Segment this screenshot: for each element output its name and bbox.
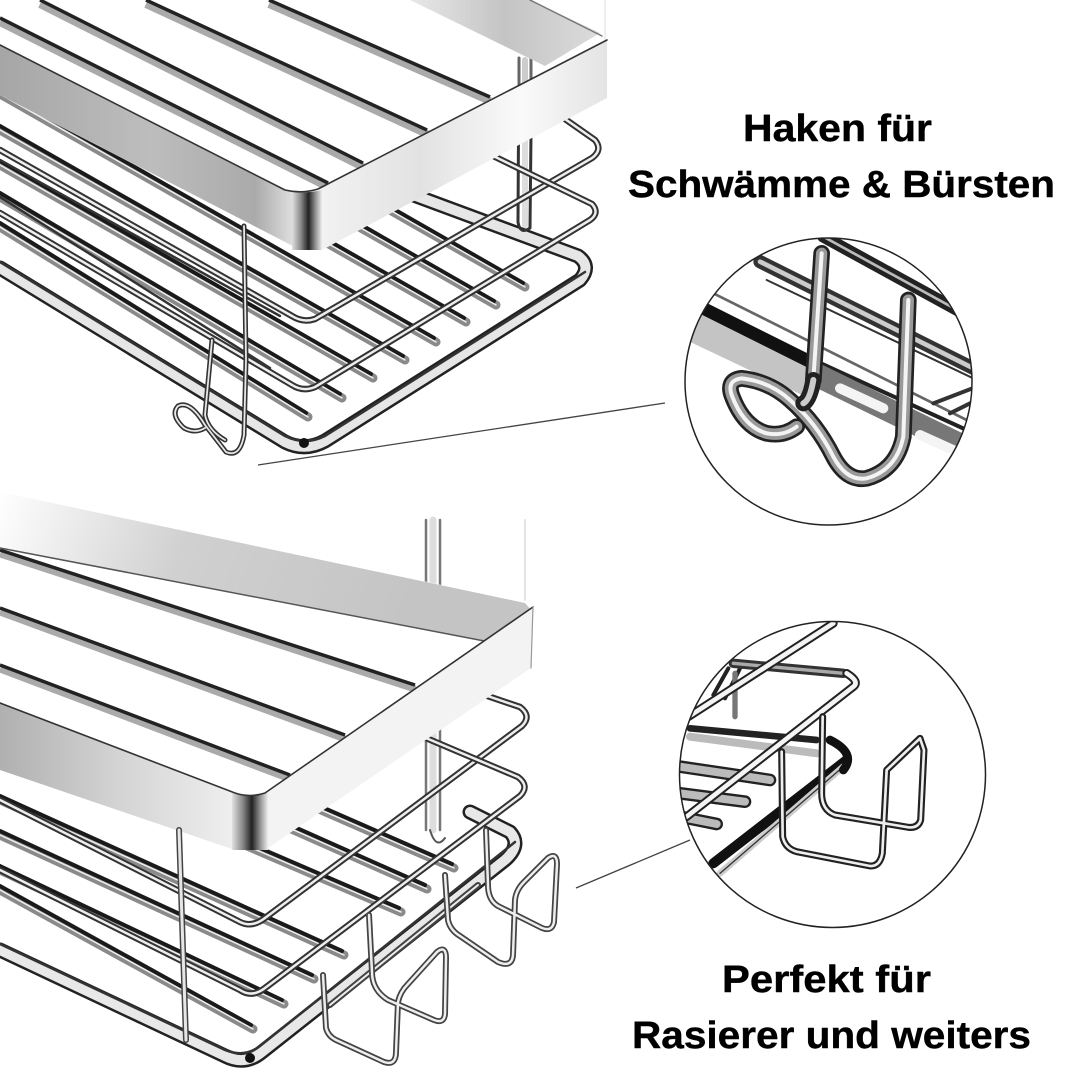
hook highlights lower rack bbox=[323, 830, 557, 1063]
lower rods bbox=[0, 666, 454, 1029]
callout line: lower bbox=[576, 840, 690, 888]
rear vertical post lower rack bbox=[426, 520, 445, 842]
circle contents lower bbox=[680, 622, 928, 877]
circle outline upper bbox=[685, 238, 972, 525]
hooks lower rack bbox=[323, 830, 557, 1063]
heading: lower caption: Rasierer und weiters bbox=[632, 1015, 1031, 1057]
front frame upper rack bbox=[0, 40, 607, 250]
panel: upper rack photo bbox=[0, 0, 607, 453]
wire loops upper rack bbox=[0, 112, 598, 389]
callout line: upper bbox=[258, 403, 665, 465]
heading: lower caption: Perfekt für bbox=[722, 959, 931, 1001]
wire loops lower rack bbox=[0, 690, 527, 994]
hook upper rack bbox=[175, 226, 246, 453]
rear vertical post upper rack bbox=[518, 40, 532, 230]
panel: lower rack photo bbox=[0, 490, 557, 1063]
panel: detail circle upper hook bbox=[685, 237, 977, 525]
heading: upper caption bbox=[628, 108, 1055, 206]
base tube upper rack bbox=[0, 190, 586, 448]
vertical support lower rack bbox=[179, 830, 186, 1040]
circle outline lower bbox=[680, 622, 986, 928]
circle contents upper bbox=[691, 238, 972, 488]
heading: upper caption: Schwämme & Bürsten bbox=[628, 164, 1055, 206]
top plate lower rack bbox=[0, 490, 533, 850]
front frame lower rack bbox=[0, 607, 533, 850]
heading: upper caption: Haken für bbox=[743, 108, 932, 150]
heading: lower caption bbox=[632, 959, 1031, 1057]
base tube lower rack bbox=[0, 812, 515, 1063]
lower rods of upper rack bbox=[0, 0, 525, 417]
top plate bbox=[0, 0, 607, 250]
panel: detail circle lower hook bbox=[679, 621, 986, 928]
